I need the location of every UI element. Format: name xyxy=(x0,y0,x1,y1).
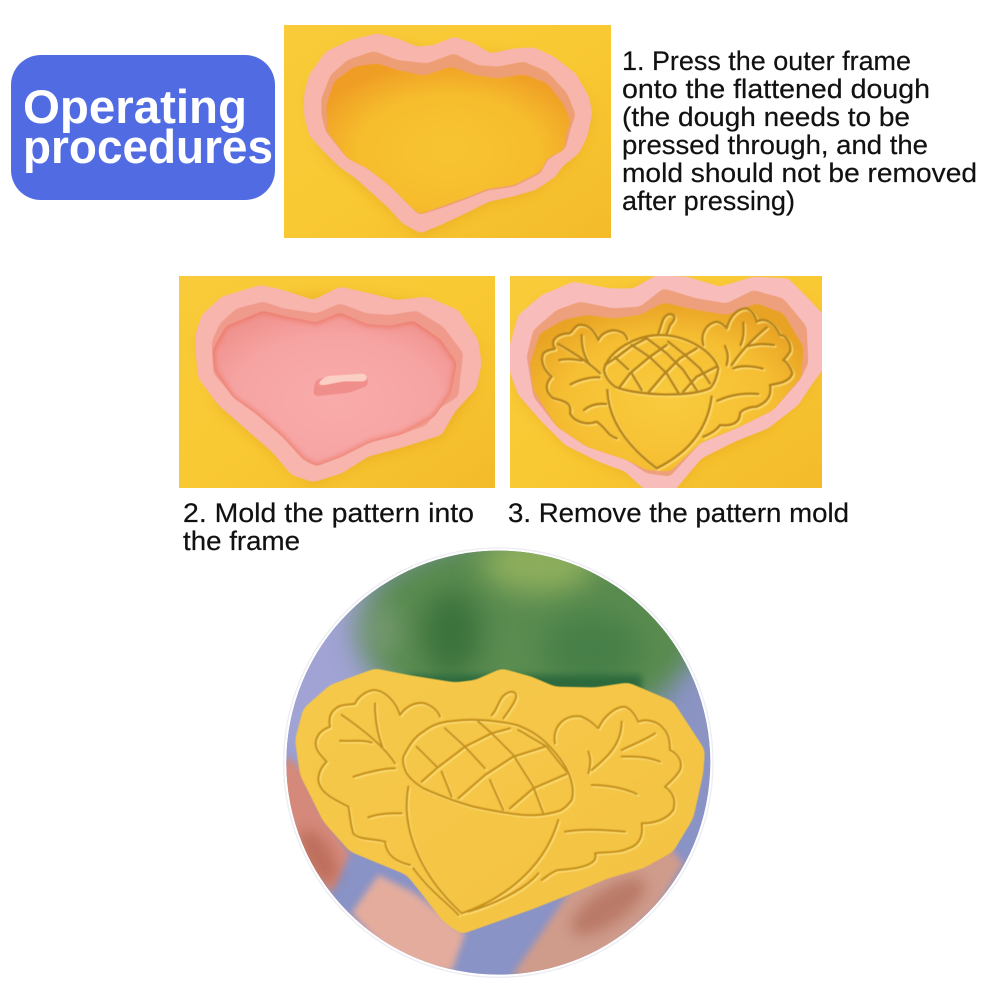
text: step 3 caption: 3. Remove the pattern mold xyxy=(508,498,849,528)
circular photo: finished acorn cookie held in fingers xyxy=(283,548,714,978)
icon: acorn and oak leaf imprint xyxy=(542,308,792,468)
background: lavender and green blur xyxy=(286,550,710,778)
text: step 1 instructions: after pressing) xyxy=(622,186,795,216)
text: step 1 instructions xyxy=(622,46,977,216)
photo: step 1 outer frame on yellow dough xyxy=(284,25,611,238)
photo: step 2 pattern mold pressed into frame xyxy=(179,276,495,488)
photo: step 3 imprinted acorn inside frame xyxy=(508,275,828,492)
text: step 2 caption: the frame xyxy=(183,526,300,556)
text: step 2 caption xyxy=(183,498,474,556)
text: step 1 instructions: onto the flattened dough xyxy=(622,74,930,104)
text: step 2 caption: 2. Mold the pattern into xyxy=(183,498,474,528)
text: step 1 instructions: (the dough needs to be xyxy=(622,102,910,132)
icon: blurred fingers xyxy=(275,757,683,977)
text: step 1 instructions: mold should not be removed xyxy=(622,158,977,188)
title badge: Operating procedures: Operating xyxy=(23,80,247,133)
cookie body xyxy=(295,668,705,934)
icon: acorn and leaf relief lines xyxy=(316,690,681,915)
title badge: Operating procedures: procedures xyxy=(23,120,273,173)
text: step 1 instructions: 1. Press the outer frame xyxy=(622,46,911,76)
text: step 1 instructions: pressed through, and the xyxy=(622,130,928,160)
title badge: Operating procedures xyxy=(11,55,275,200)
icon: small mold handle xyxy=(313,373,369,397)
